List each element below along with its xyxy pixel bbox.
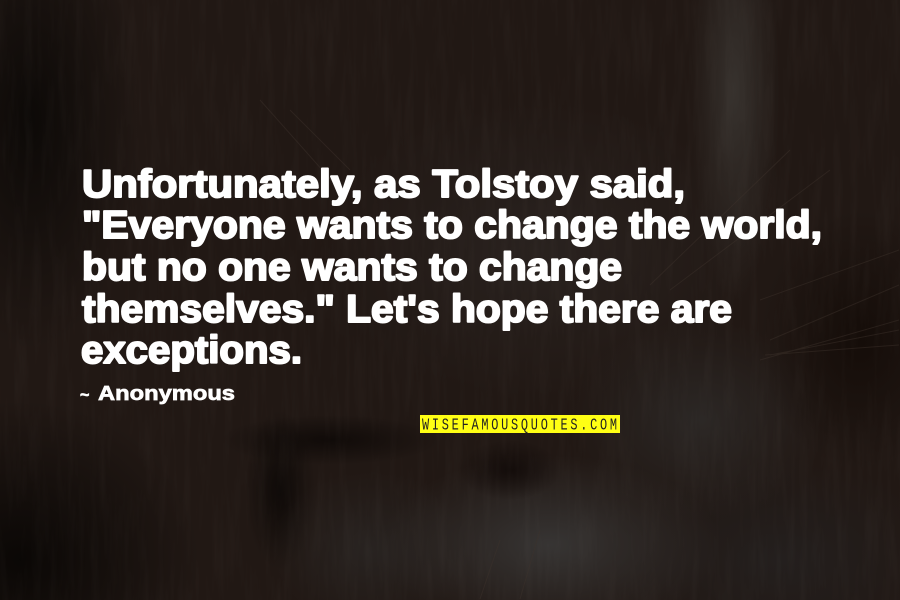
quote text: "Everyone wants to change the world, [82,204,822,247]
attribution: ~ [80,387,89,404]
quote text: Unfortunately, as Tolstoy said, [82,163,685,206]
quote text: but no one wants to change [82,246,622,289]
quote text [81,163,822,372]
quote text: themselves." Let's hope there are [82,288,732,331]
whisker strands [260,100,899,599]
watermark badge: WISEFAMOUSQUOTES.COM [422,417,620,435]
quote text: exceptions. [81,329,302,372]
attribution: Anonymous [98,383,235,405]
